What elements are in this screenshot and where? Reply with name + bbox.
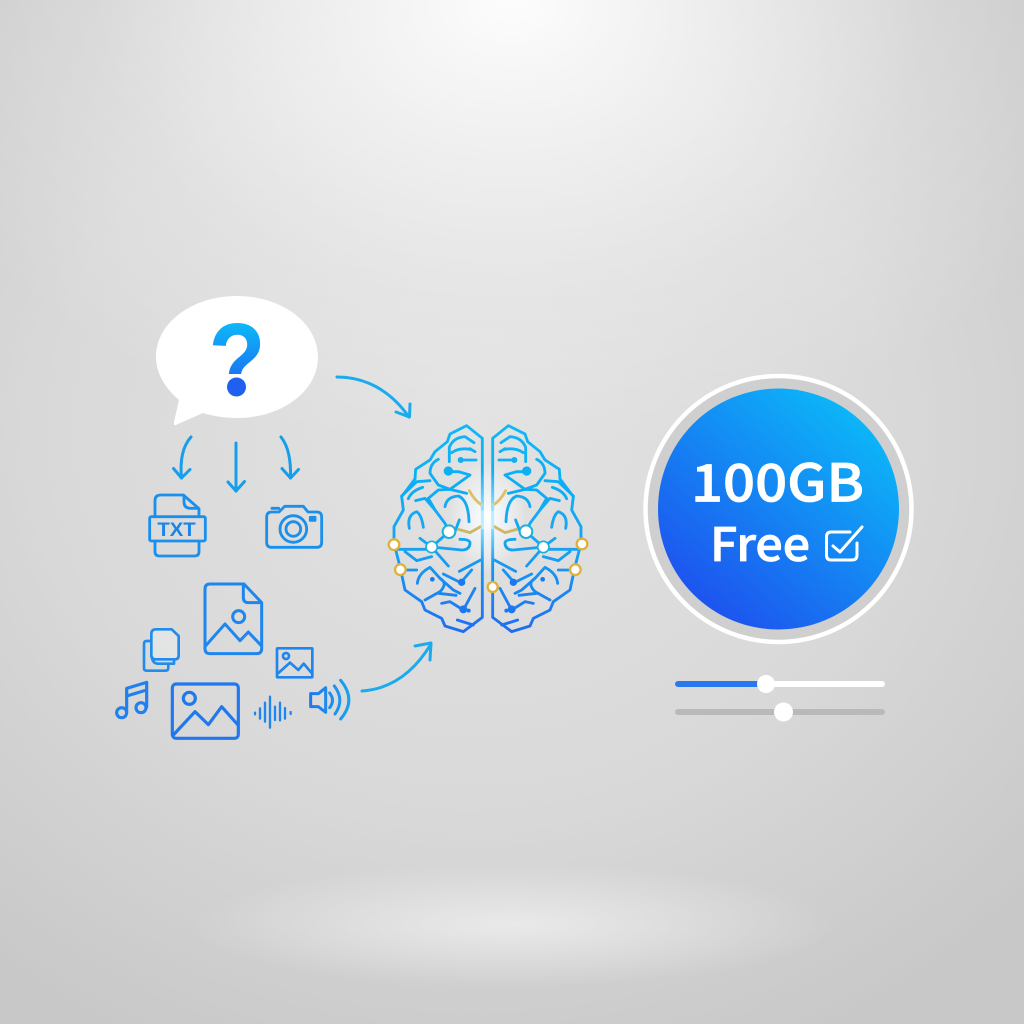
storage badge [646, 376, 912, 642]
brain centre glow [449, 460, 526, 573]
100GB: 100GB [691, 442, 864, 516]
speech bubble with question mark [156, 296, 318, 425]
arrow: down left [174, 437, 191, 478]
arrow: down centre [228, 443, 244, 491]
spine glow [482, 470, 493, 563]
bubble shape [156, 296, 318, 425]
icon: TXT file [150, 495, 205, 556]
badge disc [658, 388, 899, 630]
illustration [115, 296, 914, 740]
icon: speaker [311, 680, 349, 719]
gold traces [469, 491, 482, 505]
question mark: ? [209, 303, 265, 420]
slider: blue [675, 675, 885, 693]
right hemisphere [493, 426, 581, 632]
question mark dot [227, 378, 246, 396]
arrow: question to brain [337, 377, 410, 417]
icon: sound waveform [255, 697, 291, 728]
slider: grey [675, 702, 885, 722]
icon: large picture [172, 684, 238, 738]
icon: small picture [277, 648, 312, 677]
arrow: down right [281, 437, 298, 478]
brain [389, 426, 587, 632]
label: TXT: TXT [157, 520, 196, 541]
gold node: centre [488, 582, 498, 592]
icon: image document [205, 584, 262, 654]
gold node: right upper [577, 539, 587, 549]
gold node: left lower [395, 564, 406, 575]
arrow: media to brain [362, 643, 431, 691]
gold node: left upper [389, 539, 399, 550]
icon: music note [117, 682, 147, 718]
white nodes [443, 525, 455, 538]
icon: checkbox [826, 527, 862, 560]
badge halo [646, 376, 912, 642]
gold node: right lower [570, 564, 581, 575]
Free: Free [710, 509, 810, 575]
icon: stacked files [144, 629, 179, 671]
icon: camera [267, 506, 322, 547]
filled synapses [444, 466, 453, 476]
left hemisphere [394, 426, 482, 632]
